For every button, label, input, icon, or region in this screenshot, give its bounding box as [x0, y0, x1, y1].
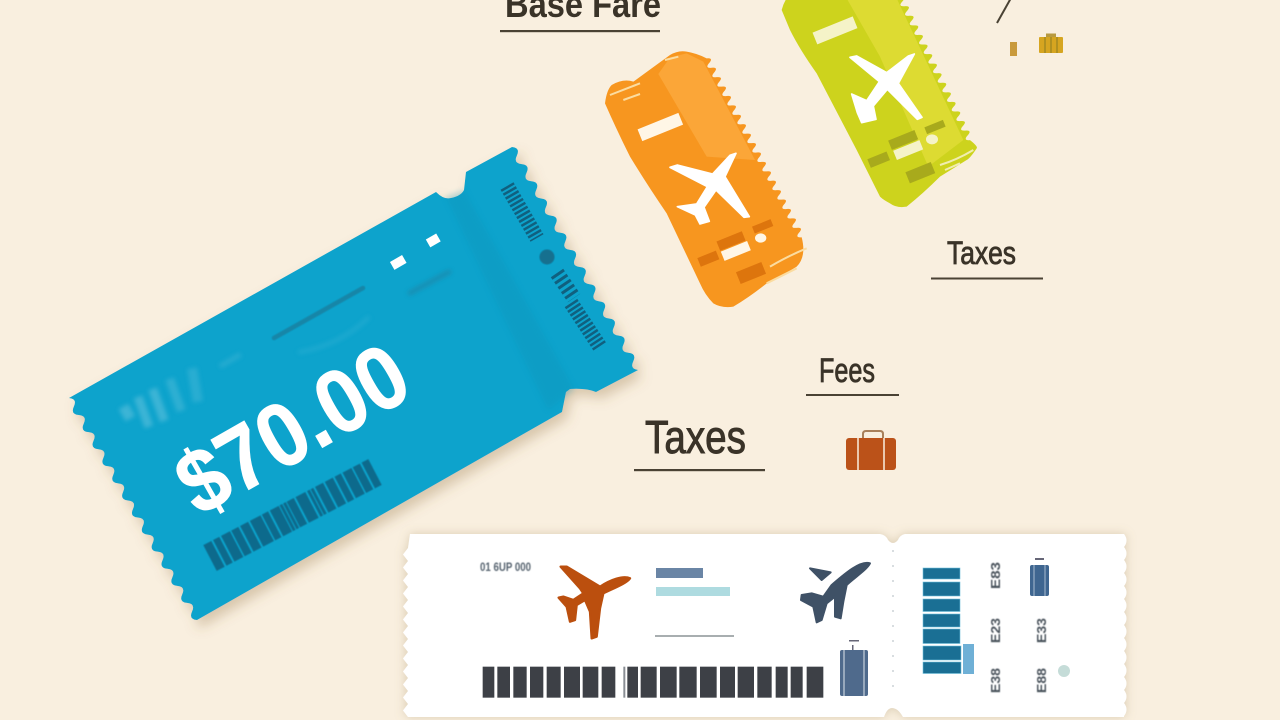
stub luggage icon — [1030, 558, 1049, 596]
plane — [670, 153, 749, 224]
flight code: 01 6UP 000 — [480, 560, 531, 574]
orange ticket — [605, 51, 807, 307]
dark print blocks — [697, 219, 773, 284]
perforation — [892, 550, 894, 700]
icon: small tan luggage — [1010, 42, 1017, 56]
light blue bar — [963, 644, 974, 674]
white label bar — [638, 113, 683, 141]
price: $70.00 — [159, 325, 426, 535]
info bars — [655, 568, 734, 637]
tear-off band shading — [446, 190, 574, 410]
stub dot — [1058, 665, 1070, 677]
stub barcode — [507, 186, 600, 347]
stub codes: E23 — [988, 618, 1003, 643]
orange plane icon — [559, 567, 630, 638]
white bar and dot — [893, 140, 923, 160]
plane — [850, 54, 922, 123]
light stripe — [658, 53, 755, 160]
heading: Taxes small: Taxes — [947, 235, 1016, 271]
stub codes: E38 — [988, 668, 1003, 693]
boarding pass — [403, 534, 1126, 717]
luggage icon — [840, 640, 868, 696]
blue ticket: $70.00 — [69, 147, 638, 620]
stub codes: E33 — [1034, 618, 1049, 643]
heading: Taxes small — [931, 235, 1043, 280]
faded print marks — [119, 352, 242, 428]
main barcode — [210, 472, 375, 558]
stub dot — [540, 250, 554, 264]
white bar and dot — [721, 241, 751, 261]
label bar — [813, 16, 857, 44]
lime ticket — [782, 0, 977, 207]
pointer stroke — [997, 0, 1011, 23]
ticket shape — [605, 51, 803, 307]
slate plane icon — [801, 563, 870, 622]
icon: yellow suitcase — [1039, 34, 1063, 53]
stub codes — [988, 562, 1049, 693]
barcode — [483, 667, 823, 698]
stacked blue bars — [923, 568, 961, 674]
detail lines — [274, 272, 449, 352]
icon: brown briefcase — [846, 431, 896, 470]
light stripe — [847, 0, 963, 167]
top edge marks — [610, 57, 807, 283]
ticket shape — [69, 147, 638, 620]
heading: Taxes large: Taxes — [645, 411, 746, 463]
stub codes: E83 — [988, 562, 1003, 589]
ticket shape — [782, 0, 977, 207]
heading: Fees: Fees — [819, 352, 875, 390]
white marks — [390, 234, 441, 270]
pass shape — [403, 534, 1126, 717]
stub codes: E88 — [1034, 668, 1049, 693]
dark print blocks — [867, 120, 946, 183]
edge mark — [940, 150, 973, 170]
